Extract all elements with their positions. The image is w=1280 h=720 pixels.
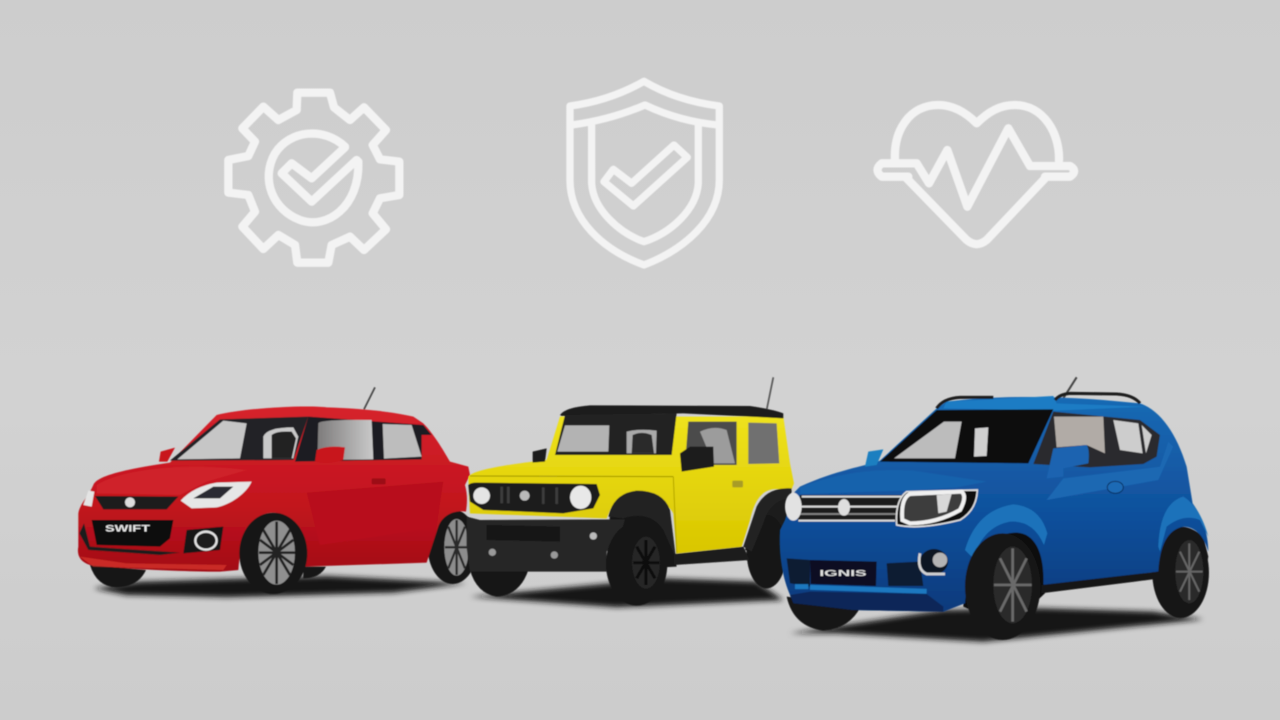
shield band xyxy=(572,105,718,125)
icon: gear with check xyxy=(228,93,399,263)
windshield xyxy=(555,413,677,455)
seat stripe xyxy=(974,427,988,457)
front plate xyxy=(810,560,877,586)
front intake xyxy=(92,520,173,547)
grille slots xyxy=(502,487,557,504)
bumper highlight xyxy=(80,557,227,570)
icon: heart with pulse xyxy=(877,105,1074,244)
windshield xyxy=(170,417,308,461)
bumper strip xyxy=(795,587,927,591)
sill xyxy=(674,547,750,565)
rear wheel xyxy=(428,509,478,584)
door handle xyxy=(372,478,386,484)
lower bumper xyxy=(790,592,943,612)
rear side window xyxy=(383,424,422,459)
car: yellow off-roader xyxy=(467,377,794,607)
front fender flare xyxy=(608,491,676,558)
far tyre xyxy=(470,570,528,597)
door handle xyxy=(1107,481,1123,493)
grille xyxy=(468,483,600,513)
rear wheel xyxy=(747,515,787,588)
roof xyxy=(560,405,783,418)
car: red hatchback xyxy=(78,387,478,597)
front arch xyxy=(607,502,677,570)
grille bars xyxy=(798,497,903,521)
front fender xyxy=(965,504,1047,558)
badge xyxy=(838,499,850,516)
pulse line xyxy=(877,128,1074,207)
windshield glass xyxy=(177,421,247,459)
rear side window xyxy=(748,423,779,464)
antenna xyxy=(1063,377,1077,398)
car: blue crossover xyxy=(780,377,1209,642)
shoulder highlight xyxy=(1047,442,1173,500)
windshield glass xyxy=(557,425,609,452)
door panel xyxy=(307,482,443,545)
bumper xyxy=(467,517,625,572)
rear wheel xyxy=(1152,527,1209,618)
rear arch xyxy=(745,490,792,557)
front side window xyxy=(317,420,373,460)
seat xyxy=(627,430,657,453)
headlight xyxy=(896,490,977,527)
shield check xyxy=(604,145,687,206)
front side window xyxy=(685,422,737,465)
icon: shield with check xyxy=(570,81,719,265)
hood highlight xyxy=(800,470,987,494)
rear arch xyxy=(1158,527,1208,603)
badge xyxy=(520,491,530,501)
far tyre xyxy=(787,597,861,631)
rear wheel visible xyxy=(747,515,787,588)
mirrors xyxy=(159,447,345,463)
seat xyxy=(263,427,298,458)
plate text: IGNIS xyxy=(819,568,868,578)
windshield glass xyxy=(894,422,962,458)
hood line xyxy=(470,474,673,478)
left lamp xyxy=(785,493,802,521)
windshield xyxy=(880,409,1053,463)
shield inner xyxy=(592,125,698,242)
front side window xyxy=(1054,417,1105,453)
fog lamp xyxy=(183,527,223,553)
gear outline xyxy=(228,93,399,263)
shield outer xyxy=(570,81,719,265)
far tyres xyxy=(90,565,326,587)
left lamp xyxy=(83,491,94,507)
rear fender flare xyxy=(743,488,792,552)
front wheel xyxy=(606,522,667,606)
heart bottom xyxy=(907,178,1045,244)
roof rails xyxy=(937,393,1140,408)
front wheel xyxy=(965,533,1040,640)
door handle xyxy=(732,481,743,487)
shadow xyxy=(790,608,1203,642)
mirrors xyxy=(1047,445,1089,478)
gear check mark xyxy=(282,147,357,202)
door line xyxy=(673,477,677,553)
rear fender xyxy=(1158,497,1208,552)
front arch xyxy=(963,520,1047,627)
headlight xyxy=(181,482,252,508)
grille xyxy=(797,495,905,522)
shadow xyxy=(93,576,467,597)
bumper recess xyxy=(487,525,560,542)
front plate recess xyxy=(787,558,923,587)
fog lamp xyxy=(920,549,948,574)
heart top xyxy=(895,105,1059,161)
antenna xyxy=(767,377,773,410)
front wheel xyxy=(239,513,307,594)
body xyxy=(468,417,794,553)
side glass surround xyxy=(1033,412,1160,467)
hood highlight xyxy=(97,467,247,495)
gear inner ring xyxy=(269,134,358,222)
body xyxy=(780,397,1208,612)
bumper lamps xyxy=(590,532,597,540)
lower trim xyxy=(79,523,180,555)
side window frame xyxy=(295,417,432,462)
plate text: SWIFT xyxy=(105,524,151,534)
roof highlight xyxy=(943,396,1147,411)
shadow xyxy=(470,578,783,607)
headlights xyxy=(473,487,490,504)
side skirt xyxy=(1042,572,1160,593)
antenna xyxy=(364,387,375,409)
grille xyxy=(95,496,178,509)
rear side window xyxy=(1113,420,1152,453)
mirrors xyxy=(533,447,714,472)
body xyxy=(78,406,470,572)
